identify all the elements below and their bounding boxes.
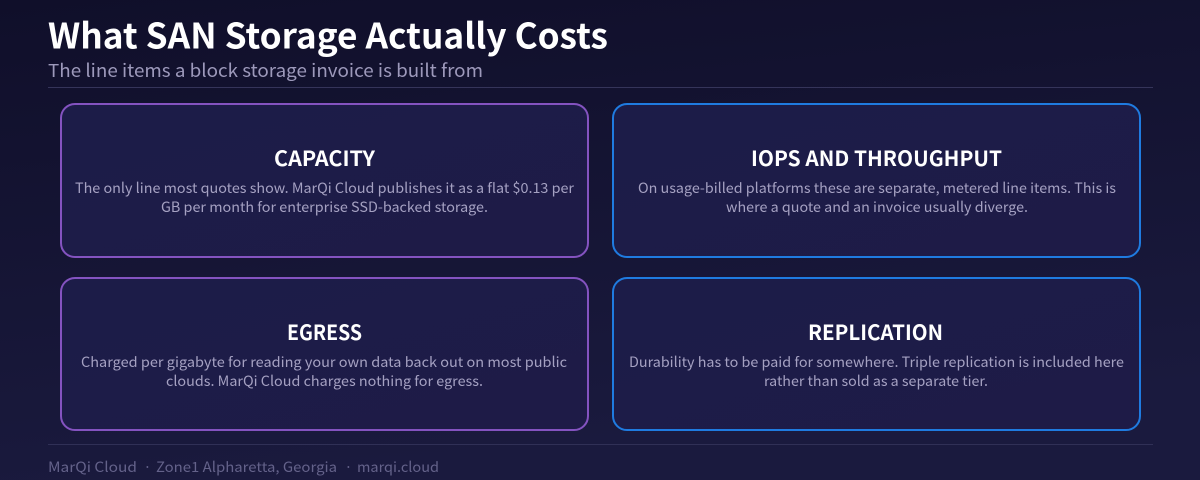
text: iops description xyxy=(638,178,1116,217)
text: capacity description xyxy=(75,178,575,217)
panel: iops and throughput xyxy=(613,104,1140,257)
panel: replication xyxy=(613,278,1140,430)
heading: capacity: CAPACITY xyxy=(274,143,376,173)
footer xyxy=(48,457,439,477)
footer: MarQi Cloud xyxy=(48,457,137,477)
title: What SAN Storage Actually Costs xyxy=(48,8,608,60)
panel: egress xyxy=(61,278,588,430)
heading: egress: EGRESS xyxy=(287,317,362,347)
text: egress description xyxy=(81,352,567,391)
footer: marqi.cloud xyxy=(357,457,439,477)
text: capacity description: The only line most quotes show. MarQi Cloud publishes it as a flat $0.13 per xyxy=(75,178,575,198)
footer: · xyxy=(344,457,352,477)
text: iops description: On usage-billed platforms these are separate, metered line items. This is xyxy=(638,178,1116,198)
text: replication description: Durability has to be paid for somewhere. Triple replication is included here xyxy=(629,352,1124,372)
text: replication description xyxy=(629,352,1124,391)
text: capacity description: GB per month for enterprise SSD-backed storage. xyxy=(161,197,488,217)
subtitle: The line items a block storage invoice is built from xyxy=(48,57,483,83)
heading: replication: REPLICATION xyxy=(808,317,943,347)
text: iops description: where a quote and an invoice usually diverge. xyxy=(726,197,1028,217)
footer: Zone1 Alpharetta, Georgia xyxy=(156,457,337,477)
text: replication description: rather than sold as a separate tier. xyxy=(764,371,988,391)
panel: capacity xyxy=(61,104,588,257)
text: egress description: Charged per gigabyte for reading your own data back out on most public xyxy=(81,352,567,372)
text: egress description: clouds. MarQi Cloud charges nothing for egress. xyxy=(166,371,483,391)
footer: · xyxy=(144,457,151,477)
heading: iops and throughput: IOPS AND THROUGHPUT xyxy=(751,143,1002,173)
